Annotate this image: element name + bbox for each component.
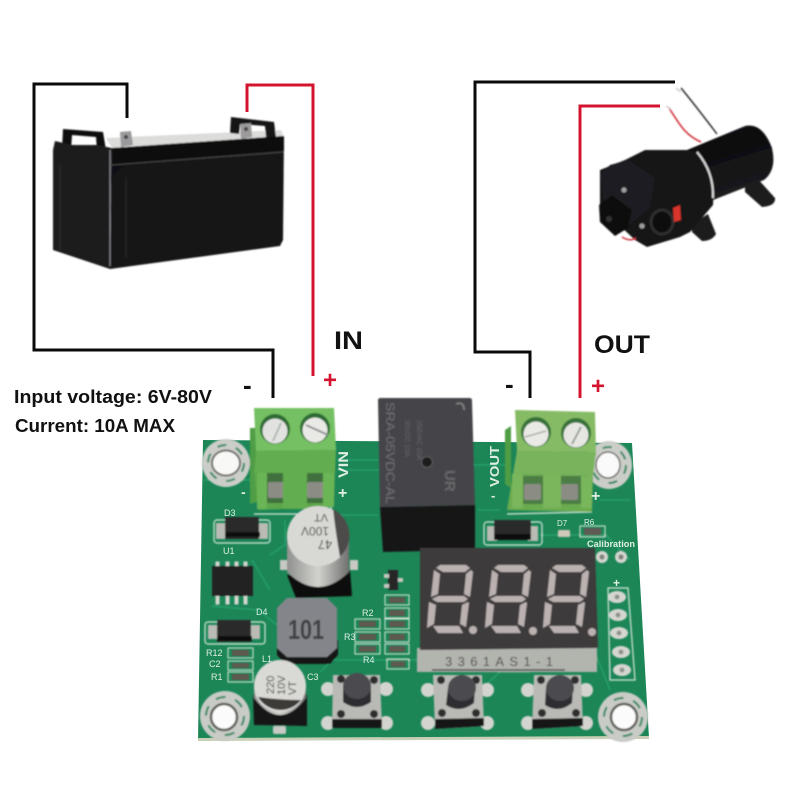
- battery lid band: [112, 136, 284, 165]
- capacitor label: VT: [314, 511, 328, 523]
- transistor: [384, 570, 403, 590]
- board silkscreen labels: Calibration: [587, 539, 635, 549]
- relay: 250VAC 10A: [415, 420, 422, 460]
- board silkscreen labels: R3: [344, 632, 356, 642]
- pump port block: [599, 195, 632, 236]
- relay: 30VDC 10A: [403, 420, 410, 457]
- pump red switch: [673, 205, 681, 222]
- capacitor 47uF 100V: [280, 506, 358, 598]
- capacitor 220uF 10V: [253, 660, 307, 734]
- board silkscreen labels: [206, 446, 635, 682]
- battery: [53, 117, 284, 269]
- board silkscreen labels: R2: [362, 608, 374, 618]
- board silkscreen labels: VIN: [335, 451, 351, 478]
- input voltage specification: Input voltage: 6V-80V: [14, 387, 212, 407]
- pump: [599, 88, 775, 247]
- board silkscreen labels: +: [338, 485, 347, 502]
- board silkscreen labels: L1: [262, 654, 272, 664]
- chip U1: [212, 562, 253, 604]
- black wire: pump negative: [475, 82, 675, 398]
- mounting hole: bottom left: [200, 691, 250, 741]
- resistors: [228, 595, 409, 682]
- label: IN: IN: [334, 327, 363, 355]
- capacitor label: 10V: [276, 675, 288, 695]
- inductor L1: 101: [288, 614, 324, 645]
- diode D4: [205, 620, 265, 644]
- inductor L1: [277, 598, 338, 664]
- capacitor label: [265, 675, 299, 695]
- board silkscreen labels: +: [613, 576, 620, 590]
- board silkscreen labels: C2: [209, 659, 221, 669]
- pump outlet port: [651, 210, 673, 234]
- pump head: [600, 160, 655, 228]
- red wire: battery positive: [247, 85, 313, 376]
- output positive sign: +: [591, 373, 605, 400]
- board silkscreen labels: -: [241, 484, 246, 500]
- battery left handle: [62, 129, 106, 150]
- push button 1: [321, 673, 393, 730]
- relay marking: SRA-05VDC-AL: [383, 402, 397, 504]
- battery front face: [110, 136, 284, 269]
- board silkscreen labels: -: [491, 488, 495, 503]
- board silkscreen labels: U1: [223, 546, 235, 556]
- mounting hole: bottom right: [598, 692, 648, 742]
- battery right handle: [230, 117, 276, 137]
- black wire: battery negative: [34, 84, 273, 398]
- red wire: pump positive: [580, 106, 660, 398]
- push button 3: [521, 675, 593, 730]
- battery negative terminal: [120, 131, 133, 147]
- board silkscreen labels: R12: [206, 648, 223, 658]
- output negative sign: -: [505, 369, 514, 399]
- left screw terminal: [250, 408, 336, 510]
- pump chrome ring: [697, 152, 713, 198]
- board silkscreen labels: D7: [557, 519, 568, 528]
- capacitor label: 220: [265, 676, 277, 694]
- capacitor label: [301, 511, 332, 552]
- display digit 3: [543, 565, 589, 633]
- LED D7 and resistor R6: [558, 526, 605, 537]
- pump black lead: [681, 88, 717, 134]
- circuit board: [198, 398, 649, 742]
- input positive sign: +: [323, 367, 337, 394]
- relay: UR: [441, 470, 458, 492]
- board substrate: [198, 440, 649, 740]
- capacitor label: 100V: [301, 524, 329, 538]
- current specification: Current: 10A MAX: [15, 416, 175, 436]
- silk outline: terminal left: [254, 495, 333, 514]
- pump motor cylinder: [687, 125, 773, 202]
- battery positive terminal: [240, 123, 252, 139]
- board silkscreen labels: +: [591, 488, 600, 505]
- battery side face: [53, 141, 112, 269]
- digital display: [417, 548, 598, 672]
- display part number: 3361AS1-1: [445, 654, 553, 669]
- pin header pads: [608, 588, 635, 680]
- relay: [378, 398, 475, 552]
- push button 2: [421, 675, 494, 730]
- pump front foot: [692, 214, 716, 241]
- label: OUT: OUT: [594, 331, 650, 359]
- calibration pads: [596, 551, 627, 563]
- diode D3: [214, 517, 270, 543]
- pump rear foot: [745, 178, 775, 207]
- diode D5: [484, 520, 542, 545]
- copper traces: [203, 460, 630, 690]
- board silkscreen labels: D4: [256, 607, 268, 617]
- display digit 2: [485, 565, 531, 633]
- display digit 1: [427, 565, 473, 633]
- display decimal points: [469, 626, 596, 636]
- pump red lead: [669, 108, 701, 142]
- board silkscreen labels: R4: [363, 655, 375, 665]
- capacitor label: VT: [287, 681, 299, 695]
- battery top cover: [106, 130, 284, 148]
- board silkscreen labels: D3: [224, 508, 236, 518]
- board silkscreen labels: VOUT: [487, 446, 502, 487]
- mounting hole: top left: [202, 439, 250, 487]
- board silkscreen labels: C3: [307, 672, 319, 682]
- input negative sign: -: [243, 370, 252, 400]
- board silkscreen labels: R6: [584, 518, 595, 527]
- silk outline: terminal right: [507, 512, 592, 514]
- right screw terminal: [505, 410, 596, 512]
- capacitor label: 47: [318, 537, 332, 552]
- pump housing: [600, 150, 713, 247]
- mounting hole: top right: [586, 441, 632, 489]
- board silkscreen labels: R1: [211, 672, 223, 682]
